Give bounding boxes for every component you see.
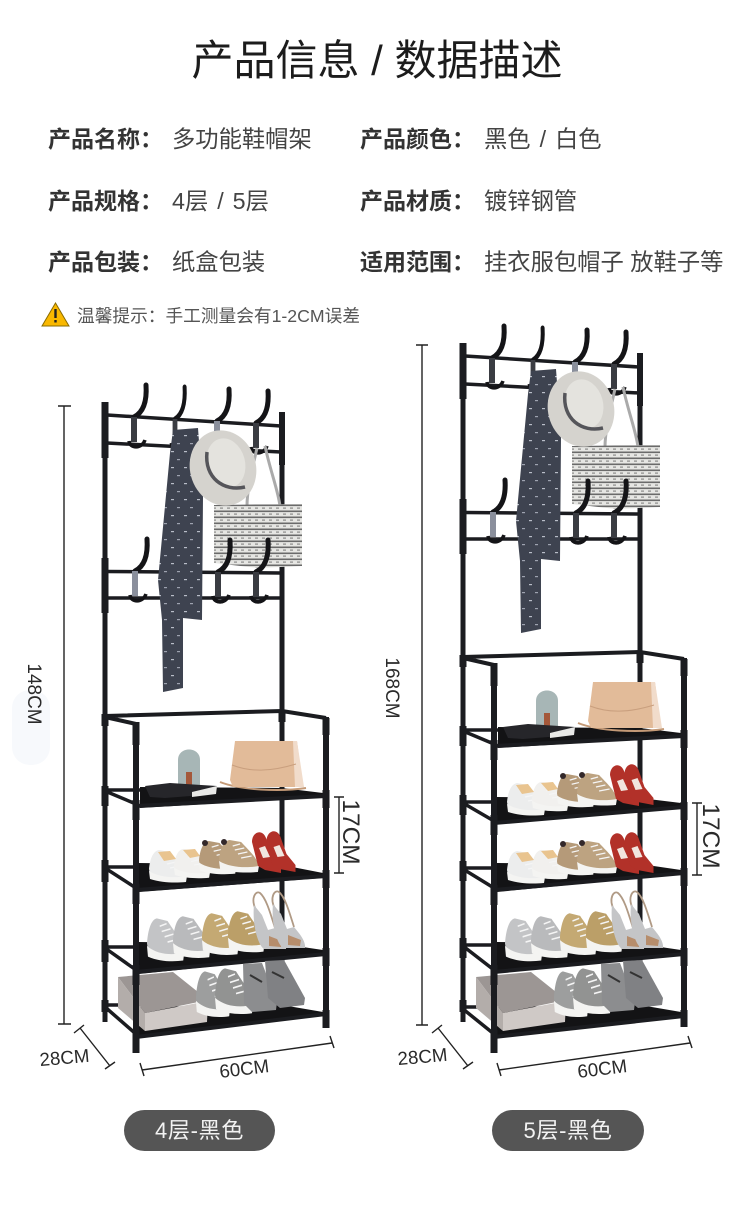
spec: product size: 产品规格： xyxy=(48,188,163,214)
spec: usage range xyxy=(360,249,723,275)
dimension: 60CM width, 5-tier: 60CM xyxy=(576,1055,628,1082)
shelf 3 xyxy=(105,942,326,974)
items on top shelf xyxy=(503,682,664,739)
spec: product colour xyxy=(360,126,602,152)
dimension: 17CM shelf gap, 5-tier: 17CM xyxy=(697,803,724,869)
title: 产品信息 / 数据描述 xyxy=(191,37,562,84)
dimension: 148CM height: 148CM xyxy=(23,663,44,725)
dimension: 148CM height xyxy=(23,406,71,1024)
shoes row 2 xyxy=(147,891,305,961)
shoes row 2 xyxy=(507,832,654,884)
dimension: 168CM height: 168CM xyxy=(381,657,402,719)
rack: 5-tier xyxy=(463,326,684,1053)
spec: product size xyxy=(48,188,269,214)
pill label: 4-tier black xyxy=(124,1110,275,1151)
icon: warning triangle xyxy=(42,303,69,326)
rack upper frame with hooks, scarf, hat and bag xyxy=(463,326,660,657)
pill label: 4-tier black: 4层-黑色 xyxy=(155,1118,244,1143)
dimension: 28CM depth, 5-tier xyxy=(397,1025,473,1069)
dimension: 28CM depth, 4-tier xyxy=(39,1025,115,1070)
rack lower frame xyxy=(463,651,684,1022)
pill label: 5-tier black xyxy=(492,1110,644,1151)
dimension: 28CM depth, 4-tier: 28CM xyxy=(39,1045,90,1070)
spec: product colour: 产品颜色： xyxy=(360,126,475,152)
shelf 3 xyxy=(463,863,684,892)
spec: product material xyxy=(360,188,577,214)
rack front posts xyxy=(494,658,684,1053)
shelf 4 xyxy=(463,942,684,973)
shoes and box row 4 xyxy=(476,960,663,1031)
shelf 2 xyxy=(463,797,684,824)
shoes row 3 xyxy=(505,891,663,961)
shoes and box row 3 xyxy=(118,960,305,1031)
shelf 1 xyxy=(105,787,326,808)
faint background blob xyxy=(12,690,50,765)
shoes row 1 xyxy=(149,831,296,883)
rack upper frame with hooks, scarf, hat and bag xyxy=(105,385,302,716)
spec: product packaging xyxy=(48,249,265,275)
spec: product name: 产品名称： xyxy=(48,126,163,152)
dimension: 60CM width, 5-tier xyxy=(497,1036,692,1082)
dimension: 60CM width, 4-tier xyxy=(140,1036,334,1082)
shoes row 1 xyxy=(507,764,654,816)
rack: 4-tier xyxy=(105,385,326,1053)
dimension: 17CM shelf gap, 4-tier: 17CM xyxy=(337,799,364,865)
dimension: 28CM depth, 5-tier: 28CM xyxy=(397,1044,448,1069)
items on top shelf xyxy=(145,741,306,798)
spec: product packaging: 产品包装： xyxy=(48,249,163,275)
spec: product colour: 黑色 / 白色 xyxy=(484,126,602,152)
shelf 2 xyxy=(105,863,326,892)
spec: usage range: 适用范围： xyxy=(360,249,475,275)
shelf 1 xyxy=(463,727,684,748)
dimension: 60CM width, 4-tier: 60CM xyxy=(218,1055,270,1082)
rack front posts xyxy=(136,717,326,1053)
warning note text: 温馨提示：手工测量会有1-2CM误差 xyxy=(77,306,360,326)
shelf 5 xyxy=(463,1005,684,1038)
pill label: 5-tier black: 5层-黑色 xyxy=(523,1118,613,1143)
spec: usage range: 挂衣服包帽子 放鞋子等 xyxy=(484,249,723,275)
shelf 4 xyxy=(105,1005,326,1038)
rack lower frame xyxy=(105,710,326,1022)
spec: product material: 镀锌钢管 xyxy=(484,188,577,214)
spec: product name: 多功能鞋帽架 xyxy=(172,126,312,152)
spec: product packaging: 纸盒包装 xyxy=(172,249,265,275)
dimension: 168CM height xyxy=(381,345,428,1025)
spec: product size: 4层 / 5层 xyxy=(172,188,269,214)
spec: product name xyxy=(48,126,312,152)
spec: product material: 产品材质： xyxy=(360,188,475,214)
